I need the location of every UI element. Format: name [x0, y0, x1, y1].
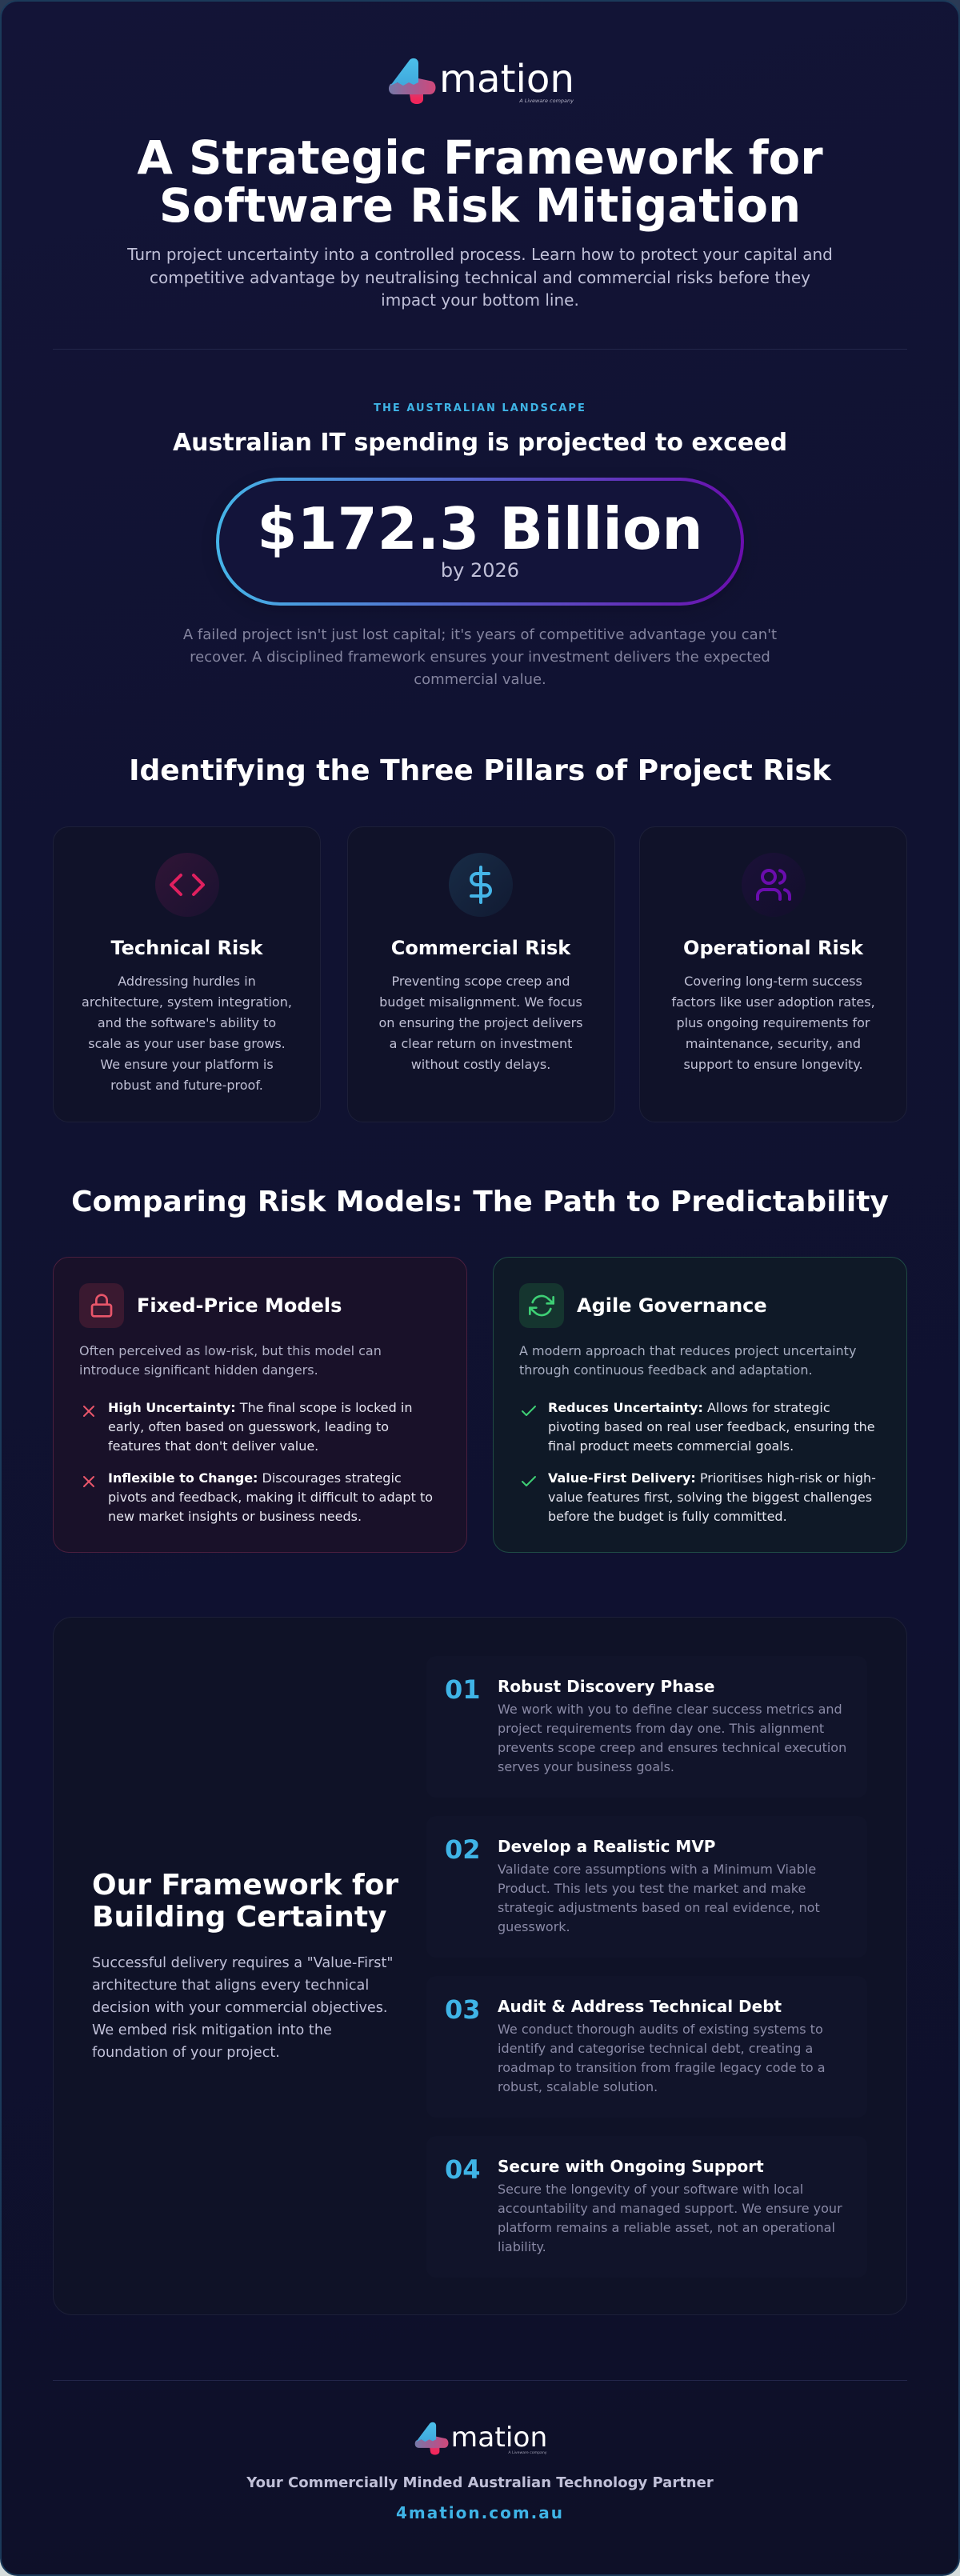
- stat pill: [216, 478, 744, 606]
- title: [137, 131, 823, 233]
- footer url: 4mation.com.au: [396, 2503, 564, 2522]
- panel: technical risk: We ensure your platform is: [100, 1057, 274, 1072]
- panel: fixed-price models: introduce significant hidden dangers.: [79, 1362, 318, 1378]
- benefit: reduces uncertainty: final product meets commercial goals.: [548, 1438, 794, 1454]
- panel: technical risk: scale as your user base grows.: [88, 1036, 286, 1051]
- step 04: Secure the longevity of your software with local: [498, 2182, 803, 2197]
- panel: agile governance: through continuous feedback and adaptation.: [519, 1362, 813, 1378]
- stat period: by 2026: [441, 559, 519, 582]
- risk: high uncertainty: High Uncertainty: The final scope is locked in: [108, 1400, 412, 1415]
- panel: technical risk: Technical Risk: [110, 937, 263, 959]
- stat explanation: [183, 626, 777, 688]
- step 01: serves your business goals.: [498, 1759, 674, 1774]
- panel: operational risk: plus ongoing requirements for: [676, 1015, 870, 1030]
- subtitle: competitive advantage by neutralising technical and commercial risks before they: [150, 267, 810, 286]
- footer tagline: Your Commercially Minded Australian Technology Partner: [246, 2474, 714, 2491]
- framework description: We embed risk mitigation into the: [92, 2022, 332, 2038]
- panel: technical risk: architecture, system integration,: [82, 994, 292, 1010]
- panel: fixed-price models: [53, 1257, 467, 1553]
- panel: operational risk: maintenance, security, and: [686, 1036, 861, 1051]
- framework description: [92, 1955, 393, 2061]
- panel: fixed-price models: Often perceived as low-risk, but this model can: [79, 1343, 382, 1358]
- title: A Strategic Framework for: [137, 131, 823, 185]
- subtitle: impact your bottom line.: [381, 290, 579, 310]
- framework description: Successful delivery requires a "Value-First": [92, 1955, 393, 1971]
- stat explanation: A failed project isn't just lost capital; it's years of competitive advantage you can't: [183, 626, 777, 643]
- step 02: Develop a Realistic MVP: [498, 1837, 715, 1856]
- risk: inflexible to change: Inflexible to Change: Discourages strategic: [108, 1470, 402, 1486]
- benefit: value-first delivery: value features first, solving the biggest challenges: [548, 1490, 872, 1505]
- framework description: architecture that aligns every technical: [92, 1978, 369, 1994]
- risk: inflexible to change: [83, 1470, 433, 1524]
- panel: technical risk: [53, 826, 321, 1122]
- risk: inflexible to change: new market insights or business needs.: [108, 1509, 362, 1524]
- panel: commercial risk: Preventing scope creep and: [391, 974, 570, 989]
- panel: agile governance: [493, 1257, 907, 1553]
- step 04: accountability and managed support. We ensure your: [498, 2201, 842, 2216]
- panel: operational risk: [639, 826, 907, 1122]
- panel: commercial risk: on ensuring the project delivers: [379, 1015, 582, 1030]
- header logo: A Liveware company: [518, 98, 574, 104]
- step 01: We work with you to define clear success metrics and: [498, 1702, 842, 1717]
- panel: agile governance: Agile Governance: [577, 1294, 767, 1317]
- step 03: 03: [445, 1994, 481, 2025]
- step 04: [426, 2136, 867, 2278]
- step 03: Audit & Address Technical Debt: [498, 1997, 782, 2016]
- panel: operational risk: support to ensure longevity.: [683, 1057, 863, 1072]
- step 02: strategic adjustments based on real evidence, not: [498, 1900, 820, 1915]
- step 01: 01: [445, 1674, 481, 1705]
- panel: commercial risk: a clear return on investment: [390, 1036, 572, 1051]
- framework description: foundation of your project.: [92, 2045, 280, 2061]
- benefit: reduces uncertainty: [522, 1400, 875, 1454]
- step 01: Robust Discovery Phase: [498, 1677, 714, 1696]
- icon: users: [741, 853, 805, 917]
- risk: high uncertainty: early, often based on guesswork, leading to: [108, 1419, 389, 1434]
- panel: technical risk: Addressing hurdles in: [118, 974, 256, 989]
- footer logo: mation: [451, 2422, 547, 2454]
- risk: inflexible to change: pivots and feedback, making it difficult to adapt to: [108, 1490, 433, 1505]
- benefit: reduces uncertainty: pivoting based on real user feedback, ensuring the: [548, 1419, 875, 1434]
- step 01: [426, 1656, 867, 1798]
- framework heading: [92, 1869, 398, 1934]
- framework description: decision with your commercial objectives.: [92, 2000, 387, 2016]
- icon: code: [155, 853, 219, 917]
- panel: commercial risk: without costly delays.: [411, 1057, 550, 1072]
- benefit: value-first delivery: before the budget is fully committed.: [548, 1509, 787, 1524]
- step 03: roadmap to transition from fragile legacy code to a: [498, 2060, 826, 2075]
- risk: high uncertainty: features that don't deliver value.: [108, 1438, 318, 1454]
- step 03: identify and categorise technical debt, creating a: [498, 2041, 813, 2056]
- step 02: Product. This lets you test the market and make: [498, 1881, 806, 1896]
- footer logo: A Liveware company: [508, 2450, 547, 2455]
- footer logo: [414, 2422, 547, 2455]
- step 03: We conduct thorough audits of existing systems to: [498, 2022, 823, 2037]
- step 02: 02: [445, 1834, 481, 1865]
- panel: operational risk: Operational Risk: [683, 937, 863, 959]
- stat explanation: recover. A disciplined framework ensures your investment delivers the expected: [190, 649, 770, 666]
- subtitle: [127, 245, 833, 310]
- risk: high uncertainty: [83, 1400, 412, 1454]
- subtitle: Turn project uncertainty into a controlled process. Learn how to protect your capital and: [127, 245, 833, 264]
- panel: operational risk: factors like user adoption rates,: [671, 994, 875, 1010]
- statistic heading: Australian IT spending is projected to exceed: [173, 429, 787, 457]
- heading: three pillars: Identifying the Three Pillars of Project Risk: [129, 754, 831, 787]
- panel: framework: [53, 1617, 907, 2315]
- panel: technical risk: robust and future-proof.: [110, 1078, 263, 1093]
- eyebrow label: THE AUSTRALIAN LANDSCAPE: [374, 402, 586, 414]
- stat explanation: commercial value.: [414, 671, 546, 688]
- header logo: mation: [439, 58, 574, 102]
- header logo: [389, 58, 574, 104]
- framework heading: Our Framework for: [92, 1869, 398, 1902]
- icon: lock: [79, 1283, 124, 1328]
- step 04: 04: [445, 2154, 481, 2185]
- icon: dollar: [449, 853, 513, 917]
- step 01: project requirements from day one. This alignment: [498, 1721, 824, 1736]
- title: Software Risk Mitigation: [159, 179, 801, 233]
- panel: technical risk: and the software's ability to: [98, 1015, 276, 1030]
- panel: commercial risk: budget misalignment. We focus: [379, 994, 582, 1010]
- stat value: $172.3 Billion: [257, 495, 703, 562]
- step 03: [426, 1976, 867, 2118]
- icon: refresh: [519, 1283, 564, 1328]
- benefit: value-first delivery: Value-First Delivery: Prioritises high-risk or high-: [548, 1470, 876, 1486]
- heading: comparing models: Comparing Risk Models: The Path to Predictability: [71, 1186, 889, 1218]
- panel: agile governance: A modern approach that reduces project uncertainty: [519, 1343, 856, 1358]
- panel: fixed-price models: Fixed-Price Models: [137, 1294, 342, 1317]
- step 04: Secure with Ongoing Support: [498, 2157, 764, 2176]
- benefit: reduces uncertainty: Reduces Uncertainty: Allows for strategic: [548, 1400, 830, 1415]
- benefit: value-first delivery: [522, 1470, 876, 1524]
- panel: commercial risk: [347, 826, 614, 1122]
- step 04: liability.: [498, 2239, 546, 2254]
- step 04: platform remains a reliable asset, not an operational: [498, 2220, 835, 2235]
- step 01: prevents scope creep and ensures technical execution: [498, 1740, 846, 1755]
- panel: operational risk: Covering long-term success: [684, 974, 862, 989]
- panel: commercial risk: Commercial Risk: [391, 937, 570, 959]
- step 02: Validate core assumptions with a Minimum Viable: [498, 1862, 816, 1877]
- step 03: robust, scalable solution.: [498, 2079, 658, 2094]
- step 02: guesswork.: [498, 1919, 570, 1934]
- framework heading: Building Certainty: [92, 1901, 387, 1934]
- step 02: [426, 1816, 867, 1958]
